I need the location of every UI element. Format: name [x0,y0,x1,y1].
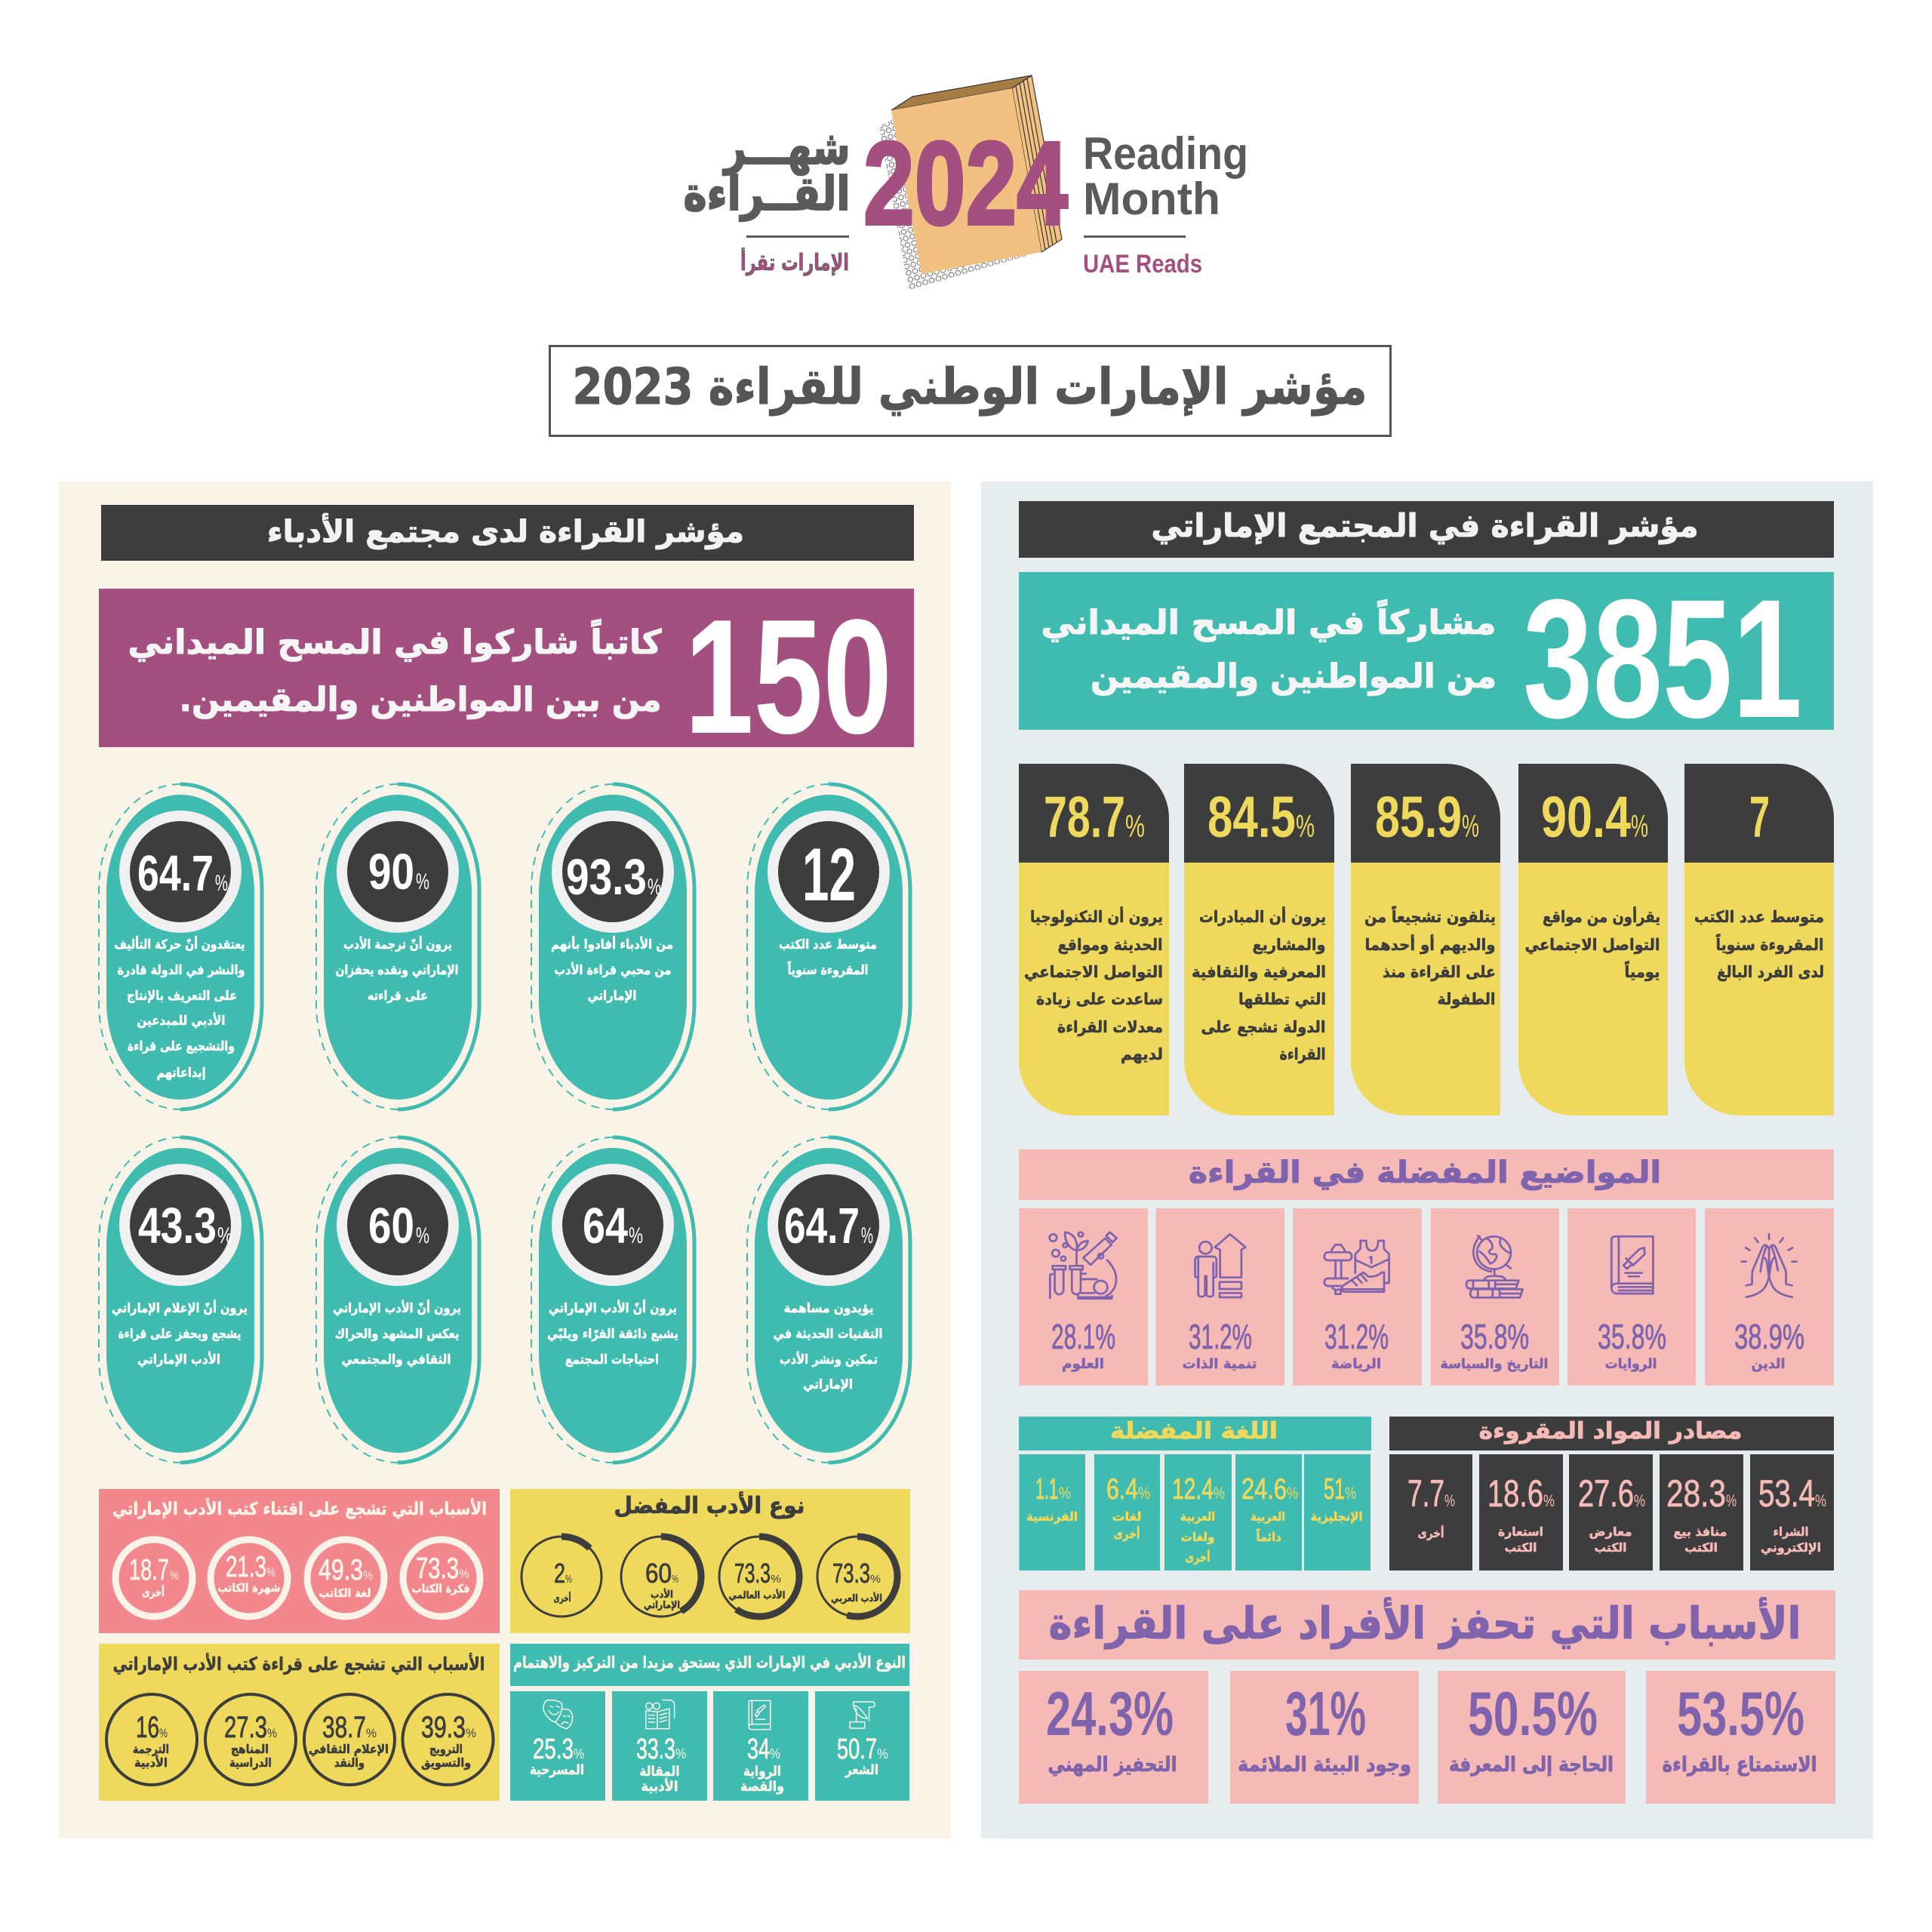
genre card: poetry: الشعر [844,1762,878,1778]
source: bookshops: منافذ بيع [1674,1524,1727,1539]
heading: writers community: مؤشر القراءة لدى مجتمع الأدباء [267,512,744,549]
ring: other 18.7%: أخرى [142,1585,165,1599]
stat card: 90.4%: يومياً [1624,960,1660,981]
pill: 60% reflects scene: يرون أنّ الأدب الإماراتي [333,1300,461,1316]
donut: other 2%: أخرى [554,1592,571,1604]
language: English [1304,1454,1371,1571]
logo: Reading Month 2024 [684,75,1248,290]
ring: curricula 27.3%: المناهج [231,1742,269,1756]
stat card: 90.4%: % [1631,808,1648,844]
motivation card: 31%: وجود البيئة الملائمة [1238,1753,1411,1777]
source: bookshops [1660,1454,1743,1571]
pill: 43.3% media: % [217,1223,232,1248]
source: book fairs [1569,1454,1653,1571]
English wordmark: UAE Reads [1083,250,1202,278]
stat card: 90.4%: التواصل الاجتماعي [1524,936,1660,954]
pill: 12 books: 12 [802,832,856,916]
source: other [1389,1454,1472,1571]
ring: media and criticism 38.7%: الإعلام الثقافي [309,1742,389,1757]
source: other: أخرى [1417,1525,1444,1540]
ring: media and criticism 38.7%: 38.7 [322,1711,366,1744]
motivation card: 24.3%: 24.3% [1046,1678,1174,1749]
ring: author language 49.3% [307,1540,384,1617]
language: Arabic and other: % [1214,1484,1225,1503]
genre card: article: 33.3 [636,1734,675,1765]
stat card: 84.5%: المعرفية والثقافية [1192,963,1326,981]
stat card: 85.9% [1351,764,1500,1115]
stat card: 85.9%: 85.9 [1375,785,1462,850]
source: online purchase: 53.4 [1758,1472,1815,1515]
banner: 150 writers [99,585,914,768]
ring: translation 16%: 16 [136,1711,159,1744]
genre card: article: الأدبية [641,1778,678,1795]
source: borrowing books: الكتب [1505,1540,1537,1555]
source: book fairs: الكتب [1594,1540,1627,1555]
stat card: 7 books: متوسط عدد الكتب [1694,908,1824,926]
language: Arabic always [1235,1454,1302,1571]
pill: 60% reflects scene: 60 [368,1198,414,1254]
donut: Arabic 73.3% [817,1537,897,1617]
topic card: sports: 31.2% [1324,1317,1389,1356]
heading: favourite topics: المواضيع المفضلة في القراءة [1189,1155,1661,1190]
panel: reading index in Emirati society [981,481,1873,1838]
icon: microscope and test tubes [1050,1232,1117,1299]
heading: favourite topics [1019,1149,1834,1200]
ring: author fame 21.3% [211,1540,288,1617]
language: French: الفرنسية [1026,1509,1078,1524]
topic card: religion: 38.9% [1734,1317,1804,1356]
title box: مؤشر الإمارات الوطني للقراءة 2023 [572,358,1367,417]
donut: Emirati 60%: الأدب [651,1588,673,1601]
topic card: novels [1567,1208,1696,1386]
topic card: religion: الدين [1751,1356,1786,1372]
stat card: 84.5%: التي تطلقها [1238,990,1326,1008]
heading: writers community [101,505,914,561]
pill: 64.7% technology: التقنيات الحديثة في [773,1327,883,1342]
language: other: 6.4 [1106,1473,1138,1506]
language: Arabic and other [1164,1454,1232,1571]
topic card: self development: 31.2% [1189,1317,1252,1356]
icon: person and arrow [1195,1234,1245,1297]
pill: 93.3% readers: من الأدباء أفادوا بأنهم [551,936,673,952]
pill: 64.7% publishing: % [215,871,228,896]
pill: 60% reflects scene: الثقافي والمجتمعي [341,1352,451,1367]
ring: curricula 27.3% [205,1694,296,1785]
source: online purchase [1750,1454,1834,1571]
language: French [1019,1454,1085,1571]
panel: genres deserving attention: النوع الأدبي في الإمارات الذي يستحق مزيدا من التركيز والاهتمام [513,1652,906,1672]
ring: translation 16%: الأدبية [134,1755,168,1770]
genre card: poetry: 50.7 [837,1734,877,1765]
ring: translation 16%: % [159,1726,168,1740]
stat card: 85.9%: يتلقون تشجيعاً من [1364,905,1496,926]
source: book fairs: 27.6 [1578,1472,1634,1515]
genre card: novel and story: الرواية [743,1764,781,1780]
topic card: sports [1293,1208,1422,1386]
donut: world 73.3%: الأدب العالمي [729,1589,785,1601]
pill: 60% reflects scene: % [416,1223,429,1248]
pill: 43.3% media: يشجع ويحفز على قراءة [118,1327,242,1342]
stat card: 78.7%: لديهم [1121,1045,1163,1063]
stat card: 78.7%: % [1125,808,1145,844]
block: preferred language: اللغة المفضلة [1110,1418,1278,1444]
language: English: % [1345,1484,1356,1503]
stat card: 84.5%: % [1296,808,1315,844]
ring: promotion 39.3%: الترويج [429,1742,463,1756]
Arabic wordmark [684,120,850,276]
pill: 64% satisfies taste: يرون أنّ الأدب الإماراتي [549,1300,677,1316]
ring: author fame 21.3%: شهرة الكاتب [217,1581,281,1595]
panel: preferred literature type [510,1489,910,1633]
Arabic wordmark: شهـــر [722,120,850,175]
donut: Emirati 60% [621,1537,701,1617]
genre card: novel and story: 34 [747,1734,770,1765]
source: other: % [1444,1491,1455,1510]
icon: globe on books [1466,1235,1522,1297]
language: Arabic and other: ولغات [1180,1530,1215,1544]
pill: 64.7% technology: يؤيدون مساهمة [783,1301,874,1316]
icon: book with quill [1611,1236,1653,1294]
ring: book idea 73.3%: % [459,1567,469,1581]
banner: 150 writers: 150 [685,585,892,768]
language: Arabic and other: العربية [1180,1509,1215,1524]
stat card: 78.7% [1019,764,1169,1115]
language: other: لغات [1112,1509,1141,1524]
donut: Arabic 73.3%: 73.3 [832,1558,870,1589]
pill: 64% satisfies taste: يشبع ذائقة القرّاء ويلبّي [547,1327,678,1342]
ring: author language 49.3%: 49.3 [318,1554,363,1586]
Arabic wordmark: الإمارات تقرأ [740,248,849,276]
ring: curricula 27.3%: الدراسية [229,1755,272,1770]
language: Arabic and other: 12.4 [1172,1473,1214,1506]
stat card: 84.5%: 84.5 [1208,785,1296,850]
language: other: % [1138,1484,1150,1503]
ring: media and criticism 38.7%: % [366,1726,377,1740]
motivation card: 50.5%: الحاجة إلى المعرفة [1449,1753,1614,1777]
pill: 64.7% technology: 64.7 [784,1198,860,1254]
stat card: 90.4%: يقرأون من مواقع [1543,906,1660,926]
source: bookshops: % [1726,1491,1737,1510]
source: book fairs: معارض [1589,1524,1632,1539]
donut: Emirati 60%: % [672,1573,678,1586]
source: online purchase: الإلكتروني [1761,1540,1821,1555]
pill: 64.7% technology [747,1137,910,1463]
stat card: 78.7%: معدلات القراءة [1057,1018,1163,1036]
donut: world 73.3% [719,1537,799,1617]
donut: Emirati 60%: 60 [645,1558,672,1589]
genre card: theatre: 25.3 [533,1734,574,1765]
ring: curricula 27.3%: % [267,1726,277,1740]
pill: 60% reflects scene [316,1137,479,1463]
stat card: 7 books [1684,764,1834,1115]
pill: 64.7% publishing [99,784,262,1109]
stat card: 90.4%: 90.4 [1541,785,1631,850]
donut: world 73.3%: 73.3 [734,1558,771,1589]
stat card: 84.5%: والمشاريع [1253,936,1325,954]
icon: book [891,75,1062,274]
stat card: 78.7%: يرون أن التكنولوجيا [1030,906,1163,926]
source: borrowing books: استعارة [1498,1524,1543,1539]
pill: 12 books: متوسط عدد الكتب [779,937,877,952]
pill: 60% reflects scene: يعكس المشهد والحراك [335,1327,459,1342]
pill: 64.7% publishing: الأدبي للمبدعين [137,1013,225,1029]
topic card: science: العلوم [1062,1356,1104,1372]
topic card: history and politics [1431,1208,1559,1386]
stat card: 78.7%: التواصل الاجتماعي [1024,963,1163,981]
English wordmark: Reading [1083,128,1248,179]
stat card: 84.5% [1184,764,1334,1115]
source: bookshops: الكتب [1684,1540,1718,1555]
genre card: novel and story: % [770,1746,780,1761]
stat card: 84.5%: القراءة [1280,1045,1325,1063]
pill: 93.3% readers: من محبي قراءة الأدب [554,962,672,978]
pill: 90% translation: % [416,869,429,894]
pill: 93.3% readers: 93.3 [566,849,647,906]
pill: 64% satisfies taste: % [629,1223,643,1248]
pill: 64.7% technology: الإماراتي [803,1377,853,1392]
pill: 12 books: المقروءة سنوياً [787,960,868,978]
genre card: article: % [675,1746,686,1761]
year 2024: 2024 [863,118,1068,250]
heading: motivations for reading [1019,1590,1835,1660]
block: sources of reading materials: مصادر المواد المقروءة [1479,1418,1742,1444]
source: online purchase: الشراء [1774,1524,1808,1539]
language: other [1094,1454,1160,1571]
topic card: science: 28.1% [1051,1317,1115,1356]
pill: 64% satisfies taste: احتياجات المجتمع [565,1352,659,1367]
ring: book idea 73.3%: 73.3 [416,1552,459,1585]
motivation card: 50.5%: 50.5% [1468,1678,1598,1749]
motivation card: 53.5%: الاستمتاع بالقراءة [1662,1753,1817,1777]
pill: 90% translation: يرون أنّ ترجمة الأدب [343,936,452,952]
ring: other 18.7% [115,1540,192,1617]
language: Arabic always: العربية [1251,1509,1285,1524]
ring: promotion 39.3%: % [466,1726,476,1740]
language: Arabic always: % [1287,1484,1298,1503]
stat card: 85.9%: على القراءة منذ [1383,963,1496,981]
motivation card: 24.3%: التحفيز المهني [1048,1753,1177,1777]
panel: reasons to read Emirati literature: الأسباب التي تشجع على قراءة كتب الأدب الإماراتي [113,1653,485,1675]
stat card: 84.5%: الدولة تشجع على [1201,1018,1325,1036]
pill: 12 books [747,784,910,1109]
icon: theatre masks [543,1700,573,1729]
stat card: 90.4% [1518,764,1668,1115]
language: Arabic always: 24.6 [1241,1473,1287,1506]
pill: 64.7% technology: % [861,1223,873,1248]
stat card: 78.7%: 78.7 [1044,785,1125,850]
ring: promotion 39.3%: والتسويق [421,1755,471,1770]
topic card: self development [1156,1208,1284,1386]
pill: 90% translation: على قراءته [368,989,428,1004]
topic card: science [1019,1208,1148,1386]
language: French: % [1059,1484,1071,1503]
banner: 150 writers: كاتباً شاركوا في المسح الميداني [128,618,662,662]
language: English: الإنجليزية [1310,1509,1363,1524]
icon: dumbbell singlet shoe [1324,1241,1389,1294]
language: French: 1.1 [1035,1473,1058,1506]
ring: other 18.7%: % [170,1568,179,1583]
donut: Arabic 73.3%: % [870,1573,881,1586]
topic card: history and politics: التاريخ والسياسة [1440,1356,1549,1372]
pill: 43.3% media: 43.3 [138,1198,217,1254]
pill: 90% translation: 90 [368,844,414,900]
banner: 3851 participants: 3851 [1523,565,1802,753]
block: preferred language [1019,1417,1371,1571]
stat card: 78.7%: الحديثة ومواقع [1058,936,1162,954]
source: book fairs: % [1634,1491,1645,1510]
icon: dotted shadow behind the book [879,113,1029,290]
genre card: novel and story: والقصة [740,1779,784,1795]
motivation card: 50.5% [1438,1671,1626,1804]
stat card: 85.9%: الطفولة [1437,990,1496,1008]
donut: other 2%: 2 [554,1558,565,1589]
banner: 3851 participants: من المواطنين والمقيمين [1091,657,1497,696]
pill: 93.3% readers [531,784,694,1109]
pill: 43.3% media [99,1137,262,1463]
genre card: theatre: المسرحية [530,1762,584,1778]
panel: preferred literature type: نوع الأدب المفضل [614,1491,804,1519]
icon: scroll and quill [850,1702,875,1728]
ring: other 18.7%: 18.7 [129,1554,169,1586]
motivation card: 31% [1230,1671,1419,1804]
ring: translation 16% [106,1694,197,1785]
Arabic wordmark: القــراءة [684,166,850,221]
stat card: 84.5%: يرون أن المبادرات [1199,906,1326,926]
pill: 64% satisfies taste: 64 [583,1198,628,1254]
stat card: 7 books: 7 [1749,785,1770,850]
genre card: theatre: % [574,1746,584,1761]
ring: book idea 73.3% [403,1540,480,1617]
heading: Emirati society: مؤشر القراءة في المجتمع الإماراتي [1152,507,1698,545]
ring: author fame 21.3%: % [266,1565,275,1580]
pill: 90% translation: الإماراتي ونقده يحفزان [335,963,459,978]
ring: promotion 39.3%: 39.3 [421,1711,466,1744]
language: other: أخرى [1114,1526,1140,1541]
stat card: 85.9%: والديهم أو أحدهما [1364,934,1496,954]
source: borrowing books: % [1543,1491,1555,1510]
source: borrowing books [1479,1454,1563,1571]
stat card: 78.7%: ساعدت على زيادة [1036,990,1163,1008]
motivation card: 31%: 31% [1285,1678,1366,1749]
genre card: article [612,1691,707,1801]
genre card: poetry [815,1691,909,1801]
topic card: history and politics: 35.8% [1460,1317,1529,1356]
source: online purchase: % [1815,1491,1826,1510]
genre card: article: المقالة [640,1764,679,1780]
ring: promotion 39.3% [403,1694,494,1785]
heading: Emirati society [1019,501,1834,558]
pill: 64.7% publishing: والنشر في الدولة قادرة [118,963,245,978]
pill: 93.3% readers: % [648,875,661,900]
topic card: novels: 35.8% [1598,1317,1666,1356]
stat card: 7 books: لدى الفرد البالغ [1717,963,1824,981]
icon: book with quill small [749,1700,771,1730]
pill: 93.3% readers: الإماراتي [587,989,637,1004]
language: English: 51 [1324,1473,1345,1506]
ring: book idea 73.3%: فكرة الكتاب [412,1582,469,1595]
English wordmark [1083,128,1248,278]
source: other: 7.7 [1407,1472,1444,1515]
banner: 3851 participants: مشاركاً في المسح الميداني [1041,598,1496,642]
icon: open book and glasses [646,1700,675,1729]
pill: 64.7% publishing: والتشجيع على قراءة [128,1039,235,1054]
icon: praying hands [1742,1234,1797,1297]
pill: 64% satisfies taste [531,1137,694,1463]
topic card: religion [1705,1208,1834,1386]
pill: 43.3% media: يرون أنّ الإعلام الإماراتي [112,1300,248,1316]
title box [549,346,1390,436]
heading: motivations for reading: الأسباب التي تحفز الأفراد على القراءة [1049,1597,1801,1650]
motivation card: 53.5%: 53.5% [1677,1678,1804,1749]
topic card: self development: تنمية الذات [1182,1356,1257,1372]
motivation card: 24.3% [1019,1671,1208,1804]
donut: Emirati 60%: الإماراتي [644,1600,680,1611]
donut: world 73.3%: % [771,1573,781,1586]
topic card: novels: الروايات [1604,1356,1657,1372]
topic card: sports: الرياضة [1331,1356,1381,1372]
pill: 64.7% publishing: على التعريف بالإنتاج [127,989,237,1004]
genre card: novel and story [713,1691,808,1801]
stat card: 7 books: المقروءة سنوياً [1716,933,1823,954]
donut: other 2%: % [565,1573,572,1586]
language: Arabic always: دائماً [1256,1527,1281,1544]
ring: author fame 21.3%: 21.3 [226,1551,266,1583]
banner: 150 writers: من بين المواطنين والمقيمين. [180,681,661,719]
panel: reading index among writers [59,481,951,1838]
source: bookshops: 28.3 [1666,1472,1726,1515]
language: Arabic and other: أخرى [1185,1549,1211,1564]
ring: media and criticism 38.7%: والنقد [334,1755,365,1770]
pill: 64.7% publishing: يعتقدون أنّ حركة التأليف [115,936,245,952]
ring: author language 49.3%: لغة الكاتب [318,1586,371,1600]
genre card: theatre [510,1691,605,1801]
ring: author language 49.3%: % [363,1568,373,1583]
pill: 43.3% media: الأدب الإماراتي [137,1352,220,1367]
ring: media and criticism 38.7% [304,1694,395,1785]
genre card: poetry: % [877,1746,888,1761]
panel: reasons to buy Emirati literature: الأسباب التي تشجع على اقتناء كتب الأدب الإماراتي [112,1497,487,1519]
motivation card: 53.5% [1646,1671,1835,1804]
stat card: 85.9%: % [1462,808,1479,844]
panel: genres deserving attention [510,1644,909,1801]
panel: reasons to read Emirati literature [99,1644,500,1801]
English wordmark: Month [1083,174,1220,224]
donut: other 2% [521,1537,601,1617]
source: borrowing books: 18.6 [1487,1472,1543,1515]
donut: Arabic 73.3%: الأدب العربي [831,1592,882,1604]
block: sources of reading materials [1389,1417,1834,1571]
ring: translation 16%: الترجمة [133,1742,169,1756]
pill: 64.7% publishing: 64.7 [137,845,214,902]
panel: reasons to buy Emirati literature [99,1489,500,1633]
ring: curricula 27.3%: 27.3 [224,1711,267,1744]
pill: 64.7% technology: تمكين ونشر الأدب [780,1352,878,1367]
banner: 3851 participants [1019,565,1834,753]
pill: 90% translation [316,784,479,1109]
pill: 64.7% publishing: إبداعاتهم [157,1066,205,1081]
